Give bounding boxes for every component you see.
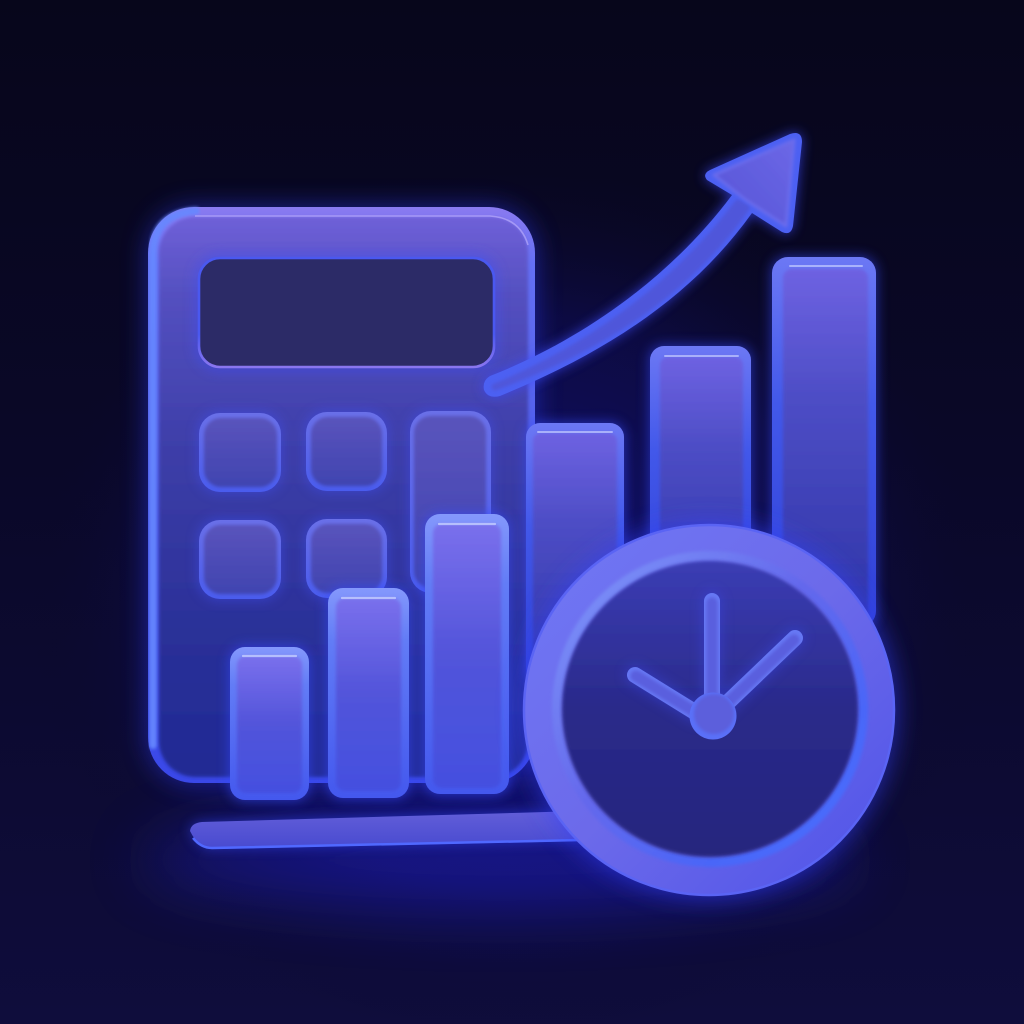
clock hub <box>690 692 736 740</box>
calculator keys <box>198 410 492 600</box>
calculator <box>148 207 535 783</box>
clock rim <box>524 525 894 895</box>
back bars <box>525 256 877 684</box>
growth arrow <box>484 133 802 397</box>
front bars <box>229 513 510 801</box>
baseline <box>190 811 580 849</box>
clock <box>523 524 895 896</box>
clock hands <box>635 601 795 714</box>
clock face <box>562 561 858 857</box>
calculator screen <box>199 258 494 367</box>
